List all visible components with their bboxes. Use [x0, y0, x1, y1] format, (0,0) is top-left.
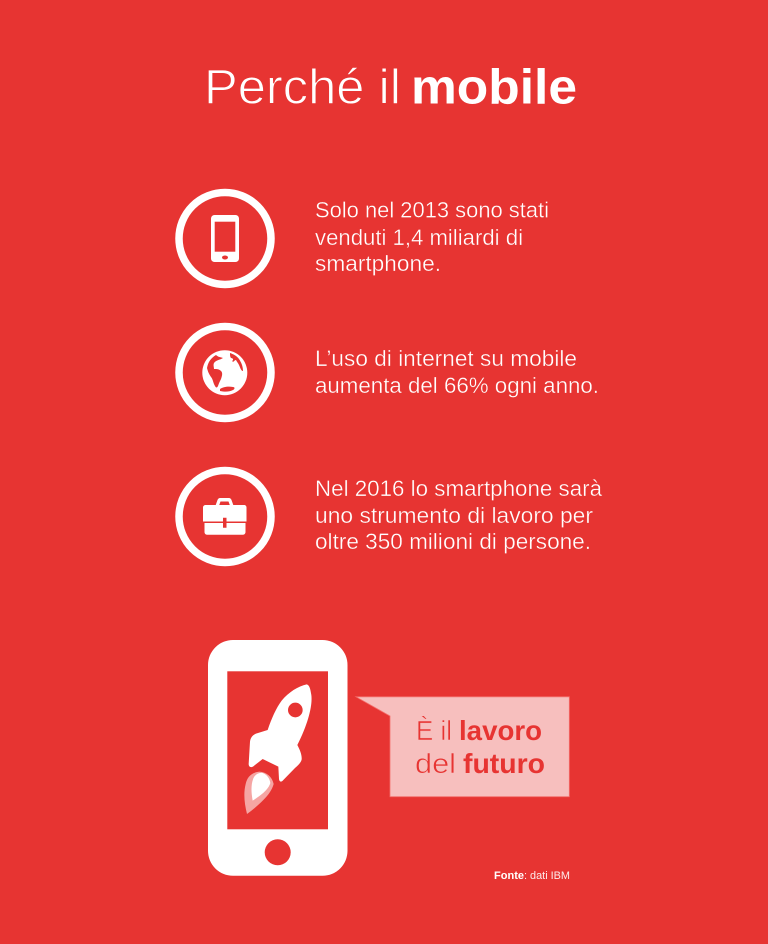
- text: smartphone as work tool: uno strumento di lavoro per: [315, 503, 593, 528]
- text: smartphones sold: Solo nel 2013 sono stati: [315, 198, 549, 222]
- callout: speech bubble: lavoro: [459, 715, 542, 746]
- text: smartphone as work tool: Nel 2016 lo smartphone sarà: [315, 476, 603, 501]
- source note: [494, 870, 570, 882]
- callout: speech bubble: futuro: [463, 748, 545, 779]
- text: smartphones sold: venduti 1,4 miliardi di: [315, 225, 523, 250]
- text: smartphones sold: smartphone.: [315, 251, 441, 276]
- text: smartphone as work tool: oltre 350 milioni di persone.: [315, 529, 591, 554]
- text: mobile internet use: aumenta del 66% ogni anno.: [315, 373, 599, 398]
- title: mobile: [411, 60, 577, 114]
- icon: smartphone in ring: [179, 192, 271, 284]
- callout: speech bubble: del: [415, 748, 456, 779]
- icon: globe in ring: [179, 326, 271, 418]
- callout: speech bubble: [356, 697, 569, 797]
- icon: briefcase in ring: [179, 470, 271, 562]
- title: Perché il: [204, 60, 401, 114]
- text: mobile internet use: L’uso di internet su mobile: [315, 346, 577, 371]
- text: smartphone as work tool: [315, 476, 603, 554]
- text: mobile internet use: [315, 346, 599, 398]
- source note: Fonte: [494, 870, 524, 882]
- icon: rocket: [244, 684, 312, 814]
- text: smartphones sold: [315, 198, 549, 276]
- source note: : dati IBM: [524, 870, 570, 882]
- title: [204, 60, 577, 114]
- callout: speech bubble: È il: [416, 715, 452, 746]
- illustration: phone with rocket: [208, 640, 348, 876]
